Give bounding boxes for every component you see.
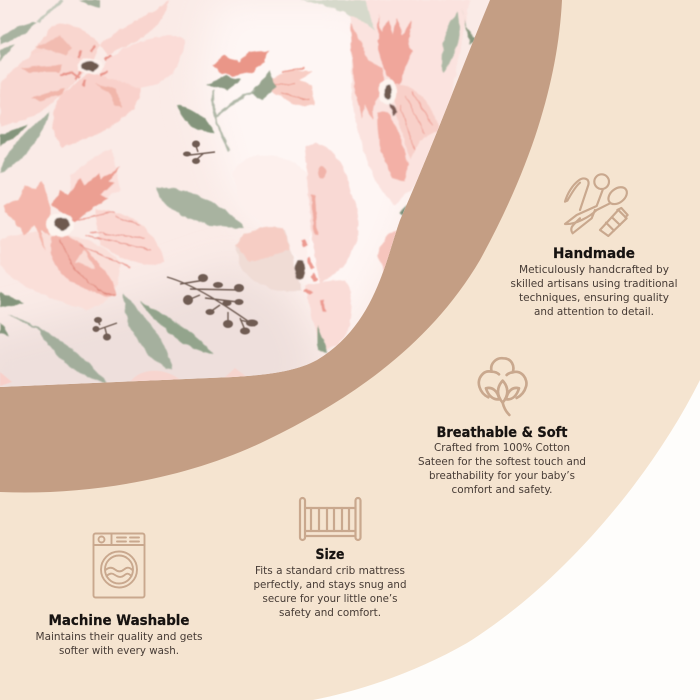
flower: small coral sprig	[206, 50, 314, 151]
feature: handmade	[510, 174, 678, 318]
text: size description: safety and comfort.	[279, 606, 381, 619]
icon: cotton boll	[479, 358, 526, 415]
flower: top right	[350, 0, 470, 205]
photo: floral crib sheet	[0, 0, 500, 420]
heading: size: Size	[316, 547, 345, 563]
text: breathable description: Sateen for the softest touch and	[418, 455, 586, 468]
flower: lower left	[0, 148, 165, 309]
text: handmade description: and attention to detail.	[534, 305, 654, 318]
heading: machine washable: Machine Washable	[48, 613, 190, 629]
text: handmade description	[510, 263, 678, 318]
heading: breathable and soft: Breathable & Soft	[436, 425, 568, 441]
white corner curve	[313, 380, 700, 700]
text: machine washable description: softer with every wash.	[59, 644, 179, 657]
flower: large pale centre	[232, 144, 358, 350]
bottom petal tips	[132, 368, 244, 381]
heading: handmade: Handmade	[553, 246, 635, 262]
feature: size	[254, 498, 406, 619]
text: machine washable description: Maintains their quality and gets	[36, 630, 203, 643]
flower: right edge bud	[376, 230, 396, 271]
text: breathable description: breathability for your baby’s	[429, 469, 575, 482]
text: handmade description: Meticulously handcrafted by	[519, 263, 670, 276]
icon: washing machine	[94, 534, 144, 598]
text: machine washable description	[36, 630, 203, 657]
text: handmade description: techniques, ensuring quality	[519, 291, 670, 304]
feature: breathable and soft	[418, 358, 586, 496]
leaves	[0, 0, 478, 383]
text: size description	[254, 564, 406, 619]
icon: crib	[300, 498, 360, 540]
text: breathable description: Crafted from 100% Cotton	[434, 441, 570, 454]
berry sprigs	[92, 140, 258, 340]
text: handmade description: skilled artisans using traditional	[510, 277, 678, 290]
text: breathable description: comfort and safety.	[452, 483, 552, 496]
brown curved band	[0, 0, 562, 493]
text: size description: Fits a standard crib mattress	[255, 564, 405, 577]
text: size description: perfectly, and stays snug and	[254, 578, 406, 591]
text: breathable description	[418, 441, 586, 496]
icon: scissors, needle and thread	[565, 174, 630, 236]
text: size description: secure for your little one’s	[262, 592, 398, 605]
flower: top left	[0, 0, 185, 148]
feature: machine washable	[36, 534, 203, 657]
